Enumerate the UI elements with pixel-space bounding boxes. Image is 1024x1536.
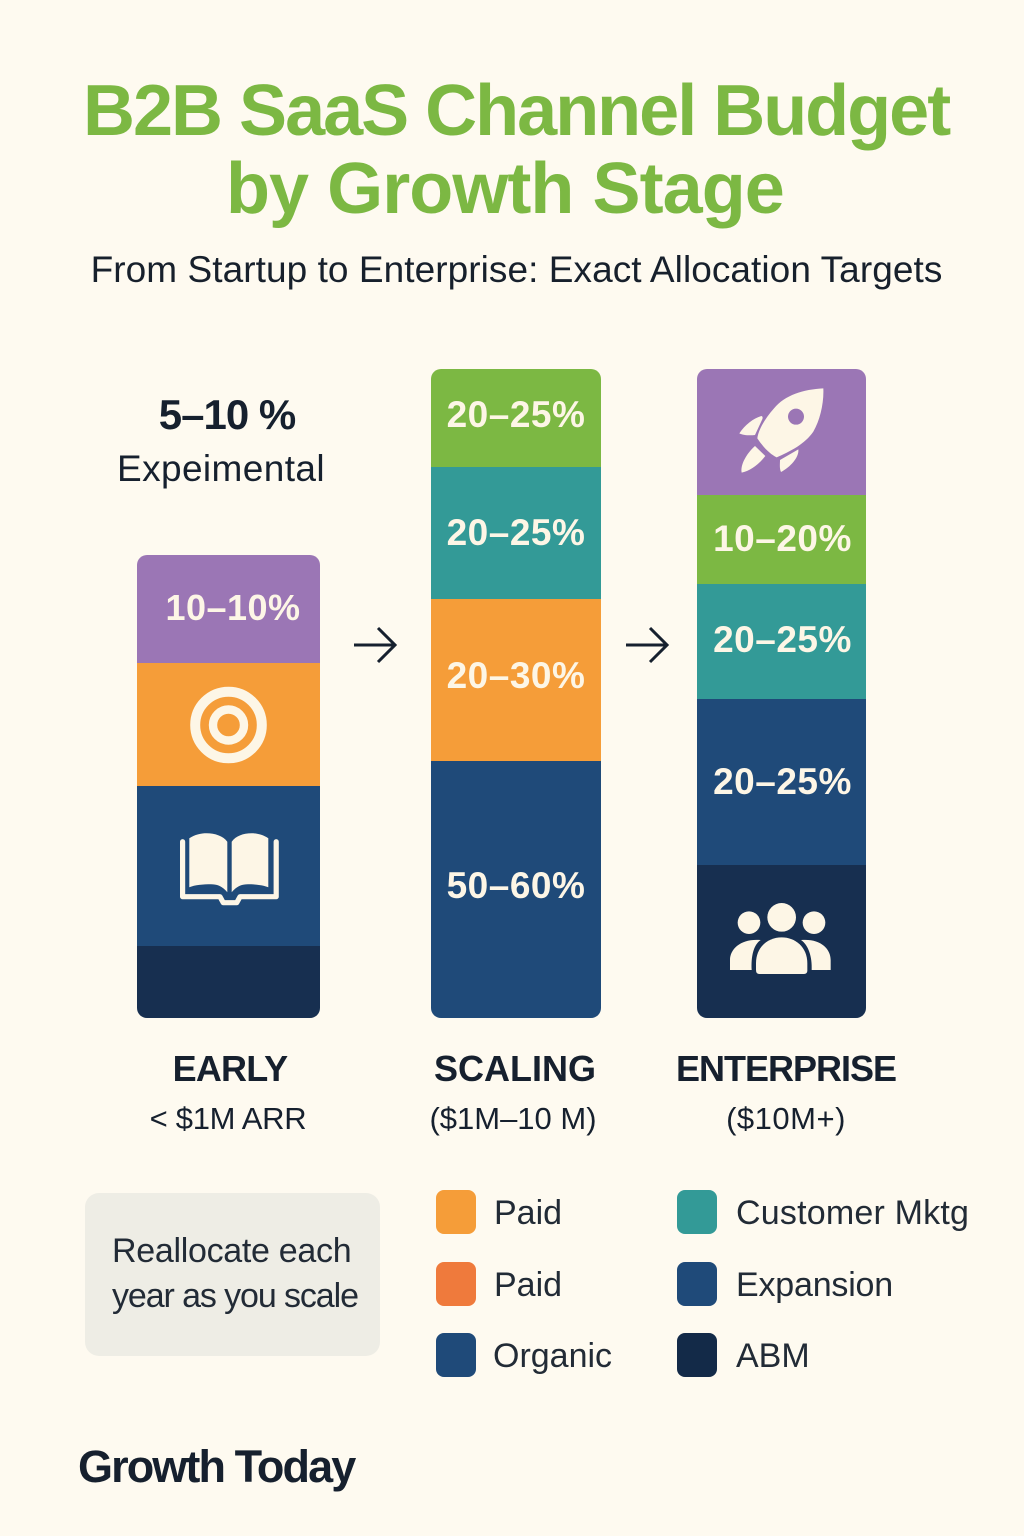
segment: purple 10-10%: [137, 555, 320, 663]
segment: blue: [697, 699, 866, 865]
segment: teal: [431, 467, 601, 599]
column: enterprise: [697, 369, 866, 1018]
legend item: paid amber: [436, 1190, 562, 1234]
label: early: < $1M ARR: [150, 1101, 306, 1136]
title: by Growth Stage: [226, 149, 784, 229]
icon: people: [730, 903, 831, 974]
segment: green: [431, 369, 601, 467]
brand: Growth Today: [78, 1441, 354, 1492]
segment: orange with target icon: [137, 663, 320, 786]
segment: navy with people icon: [697, 865, 866, 1018]
label: enterprise: ($10M+): [726, 1101, 846, 1136]
early stage callout: 5–10 %: [159, 391, 295, 438]
label: scaling: SCALING: [434, 1048, 596, 1089]
segment: blue: 20–25%: [713, 761, 852, 802]
segment: green: 20–25%: [447, 394, 585, 435]
legend item: customer marketing: Customer Mktg: [736, 1194, 969, 1232]
segment: purple with rocket icon: [697, 369, 866, 495]
arrow: scaling to enterprise: [626, 627, 669, 663]
segment: blue with book icon: [137, 786, 320, 946]
legend item: organic: Organic: [493, 1337, 612, 1375]
subtitle: From Startup to Enterprise: Exact Allocation Targets: [91, 249, 942, 290]
legend item: abm: [677, 1333, 810, 1377]
segment: blue: [431, 761, 601, 1018]
legend: [436, 1190, 969, 1377]
label: enterprise: ENTERPRISE: [676, 1048, 896, 1089]
legend item: abm: ABM: [736, 1337, 810, 1375]
label: enterprise: [676, 1048, 896, 1136]
icon: target: [190, 686, 267, 764]
callout: reallocate: [85, 1193, 380, 1356]
segment: blue: 50–60%: [447, 865, 585, 906]
legend item: expansion: [677, 1262, 893, 1306]
legend item: paid orange: [436, 1262, 562, 1306]
callout: reallocate: year as you scale: [112, 1277, 358, 1315]
callout: reallocate: Reallocate each: [112, 1232, 351, 1270]
early stage callout: Expeimental: [117, 448, 325, 489]
early stage callout: [117, 391, 325, 489]
segment: orange: 20–30%: [447, 655, 585, 696]
column: early: [137, 555, 320, 1018]
segment: navy: [137, 946, 320, 1018]
legend item: expansion: Expansion: [736, 1266, 893, 1304]
segment: purple 10-10%: 10–10%: [165, 587, 301, 628]
label: early: [150, 1048, 306, 1136]
title: [83, 71, 950, 229]
segment: teal: [697, 584, 866, 699]
title: B2B SaaS Channel Budget: [83, 71, 949, 151]
segment: green: 10–20%: [713, 518, 852, 559]
segment: teal: 20–25%: [447, 512, 585, 553]
arrow: early to scaling: [354, 627, 397, 663]
legend item: customer marketing: [677, 1190, 969, 1234]
icon: rocket: [739, 388, 824, 473]
label: early: EARLY: [173, 1048, 287, 1089]
label: scaling: ($1M–10 M): [429, 1101, 597, 1136]
legend item: organic: [436, 1333, 612, 1377]
legend item: paid amber: Paid: [494, 1194, 562, 1232]
legend item: paid orange: Paid: [494, 1266, 562, 1304]
segment: green: [697, 495, 866, 584]
segment: orange: [431, 599, 601, 761]
icon: book: [180, 833, 279, 906]
column: scaling: [431, 369, 601, 1018]
segment: teal: 20–25%: [713, 619, 852, 660]
label: scaling: [429, 1048, 597, 1136]
